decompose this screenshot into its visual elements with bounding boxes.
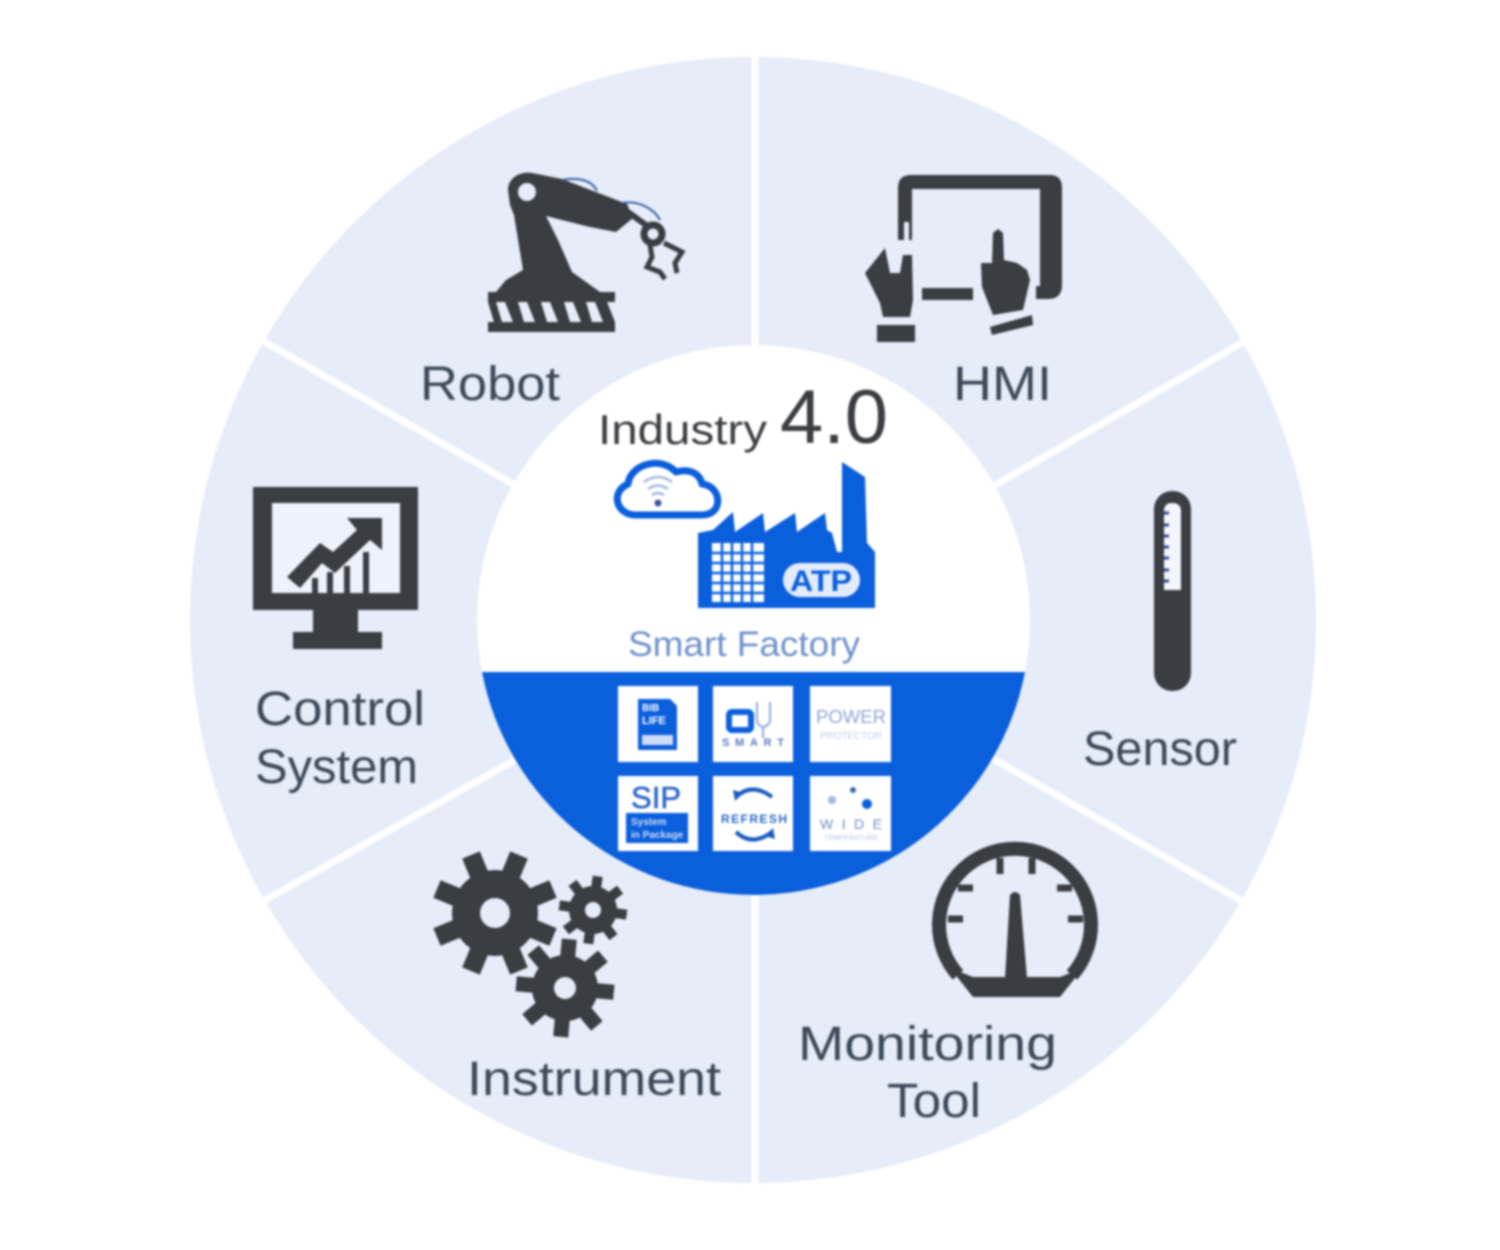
panel: sensor — [1083, 491, 1237, 776]
panel: centre hub — [477, 345, 1030, 895]
tile: wide temperature — [810, 776, 891, 851]
label: Control System: Control — [255, 683, 425, 736]
tile: SIP: System — [631, 817, 667, 828]
tile: wide temperature: TEMPERATURE — [824, 835, 878, 842]
tile: smart: SMART — [722, 737, 784, 749]
label: Monitoring Tool: Monitoring — [798, 1018, 1057, 1071]
icon: thermometer — [1154, 491, 1191, 691]
label: Instrument: Instrument — [467, 1053, 721, 1106]
label: Control System: System — [255, 741, 418, 794]
label: Sensor: Sensor — [1083, 723, 1237, 776]
icon: factory — [698, 462, 875, 608]
tile: long-life card: BIB — [642, 703, 659, 714]
panel: monitoring tool — [798, 849, 1091, 1128]
icon: touch tablet — [865, 175, 1062, 342]
heading: Industry 4.0: Industry — [598, 406, 767, 453]
panel: HMI — [865, 175, 1062, 411]
tile: refresh: REFRESH — [721, 812, 787, 826]
tile: long-life card — [618, 686, 698, 762]
tile: power protector: POWER — [816, 707, 886, 727]
panel: robot — [420, 173, 682, 411]
icon: gauge — [939, 849, 1091, 997]
heading: Industry 4.0: 4.0 — [780, 375, 888, 460]
tile: power protector — [810, 686, 891, 762]
label: Robot: Robot — [420, 358, 560, 411]
tile: smart — [713, 686, 793, 762]
icon: monitor with chart — [253, 487, 418, 649]
icon: cloud with wifi — [617, 463, 718, 515]
label: Smart Factory: Smart Factory — [628, 625, 861, 664]
label: Monitoring Tool: Tool — [887, 1075, 981, 1128]
hub white disc — [477, 345, 1030, 895]
icon: gears — [437, 855, 631, 1041]
hub blue segment — [482, 672, 1025, 895]
tile: wide temperature: WIDE — [820, 816, 882, 832]
tile: refresh — [713, 776, 793, 851]
tile: SIP: in Package — [631, 830, 684, 841]
panel: instrument — [437, 855, 721, 1106]
outer wheel disc — [190, 57, 1316, 1183]
tile: power protector: PROTECTOR — [820, 731, 882, 742]
tile: SIP: SIP — [631, 780, 681, 815]
icon: robot arm — [488, 173, 682, 332]
label: HMI: HMI — [953, 358, 1052, 411]
icon: factory: ATP — [790, 565, 852, 598]
tile: long-life card: LIFE — [642, 715, 666, 727]
panel: control system — [253, 487, 438, 794]
tile: SIP — [618, 776, 698, 851]
